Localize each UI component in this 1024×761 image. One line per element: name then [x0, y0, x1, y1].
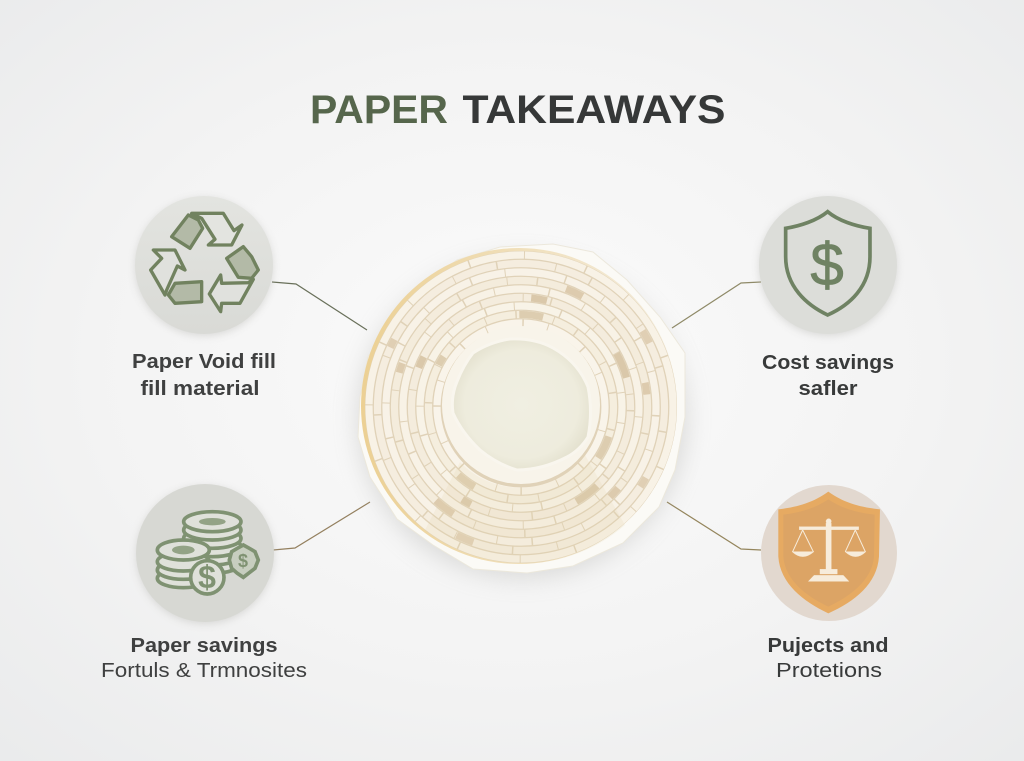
panel: cost savings	[759, 196, 897, 400]
connector: coins to roll	[273, 502, 370, 550]
tan accent segments	[378, 264, 664, 550]
label: protections	[768, 635, 888, 682]
label: cost savings	[762, 352, 894, 400]
outer paper wrapper	[358, 244, 685, 573]
connector: recycling to roll	[272, 282, 367, 330]
label: paper savings: Paper savings	[130, 635, 278, 657]
icon: shield with dollar: $	[810, 231, 844, 298]
icon: recycling disc	[135, 196, 273, 336]
icon: coin stacks: $	[238, 551, 248, 571]
warm tint lower section	[425, 455, 625, 564]
title	[310, 88, 726, 132]
icon: orange shield with scales	[761, 485, 897, 621]
central paper roll	[357, 244, 687, 578]
connector: cost savings to roll	[672, 282, 761, 328]
label: cost savings: safler	[798, 378, 858, 400]
label: protections: Pujects and	[768, 635, 888, 657]
icon: coin stacks	[136, 484, 274, 624]
connector: protections to roll	[667, 502, 761, 550]
label: paper savings	[101, 635, 307, 682]
label: paper void fill	[132, 351, 276, 400]
icon: coin stacks: $	[198, 559, 216, 595]
panel: protections	[761, 485, 897, 682]
paper rings	[369, 255, 673, 559]
label: protections: Protetions	[776, 660, 882, 682]
title: PAPER	[310, 88, 448, 132]
central hole	[442, 326, 600, 484]
label: paper savings: Fortuls & Trmnosites	[101, 660, 307, 682]
label: paper void fill: Paper Void fill	[132, 351, 276, 373]
panel: paper savings	[101, 484, 307, 682]
label: paper void fill: fill material	[140, 378, 260, 400]
icon: shield with dollar	[759, 196, 897, 336]
title: TAKEAWAYS	[462, 88, 726, 132]
label: cost savings: Cost savings	[762, 352, 894, 374]
golden rim	[361, 248, 677, 564]
panel: paper void fill	[132, 196, 276, 400]
